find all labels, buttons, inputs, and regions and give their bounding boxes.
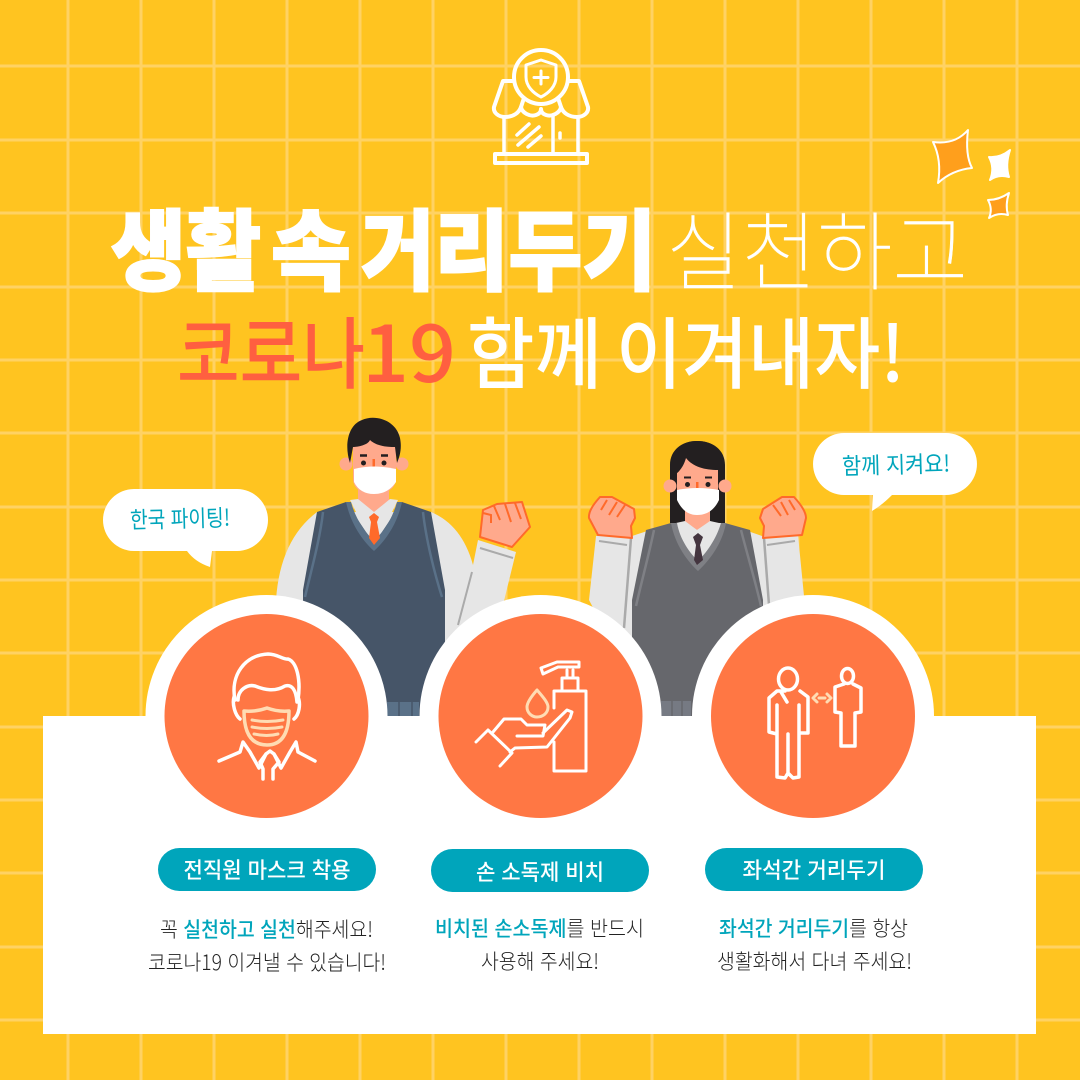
- speech bubble right: 함께 지켜요!: [842, 445, 950, 481]
- icon: small orange sparkle: [988, 193, 1009, 218]
- pill label: [158, 848, 376, 891]
- woman mask: [677, 488, 719, 515]
- card 2: sanitizer: [431, 849, 649, 976]
- body text: 비치된 손소독제를 반드시: [435, 913, 644, 943]
- title line 1: 생활: [111, 182, 261, 309]
- card 2: sanitizer: 사용해 주세요!: [481, 946, 599, 976]
- man shirt collar: [350, 499, 398, 548]
- woman vest: [632, 523, 763, 716]
- speech bubble left: 한국 파이팅!: [129, 499, 230, 535]
- body text: 좌석간 거리두기를 항상: [719, 913, 908, 943]
- title line 2: 코로나: [177, 293, 365, 405]
- icon: masked man: [219, 654, 315, 779]
- man tie: [369, 513, 380, 545]
- icon: store with shield: [494, 50, 588, 163]
- icon: hand and pump bottle: [476, 662, 586, 771]
- icon: large orange sparkle: [933, 130, 972, 183]
- character: man in vest: [276, 418, 530, 716]
- body text: 꼭 실천하고 실천해주세요!: [160, 914, 373, 944]
- man head: [353, 435, 396, 494]
- card 2: sanitizer: 손 소독제 비치: [476, 855, 604, 887]
- speech bubble right: [813, 433, 977, 511]
- card 1: mask: 코로나19 이겨낼 수 있습니다!: [148, 947, 386, 977]
- title line 1: 속: [271, 182, 351, 309]
- man neck: [358, 485, 389, 520]
- circle badge: distancing: [692, 595, 934, 837]
- pill label: [705, 848, 923, 891]
- speech bubble left: [103, 489, 268, 567]
- woman fists: [589, 497, 635, 538]
- circle badge: hand sanitizer: [420, 595, 662, 837]
- title line 1: [111, 182, 968, 309]
- card 1: mask: 전직원 마스크 착용: [184, 853, 350, 885]
- card 3: distancing: [705, 848, 923, 976]
- pill label: [431, 849, 649, 892]
- title line 1: 실천하고: [666, 183, 968, 308]
- title line 1: 거리두기: [361, 182, 656, 309]
- decorative sparkles: [933, 130, 1010, 218]
- man vest: [303, 502, 445, 716]
- white content panel: [43, 716, 1036, 1034]
- woman face: [677, 458, 718, 516]
- title line 2: [177, 293, 905, 405]
- man body and sleeves: [276, 512, 516, 690]
- woman sleeves: [589, 523, 804, 716]
- icon: white sparkle: [989, 150, 1010, 180]
- woman hair back: [670, 441, 725, 523]
- circle badge: mask: [146, 595, 388, 837]
- card 3: distancing: 좌석간 거리두기: [742, 853, 886, 885]
- card 3: distancing: 생활화해서 다녀 주세요!: [717, 946, 912, 976]
- woman tie: [693, 533, 703, 565]
- title line 2: 함께: [467, 293, 602, 405]
- man fist: [480, 502, 530, 547]
- icon: two people with arrow: [769, 668, 861, 778]
- character: woman in vest: [589, 441, 806, 716]
- title line 2: 19: [362, 293, 456, 405]
- woman neck and collar: [685, 500, 710, 530]
- title line 2: 이겨내자!: [616, 293, 905, 405]
- man mask: [354, 466, 396, 494]
- card 1: mask: [148, 848, 386, 977]
